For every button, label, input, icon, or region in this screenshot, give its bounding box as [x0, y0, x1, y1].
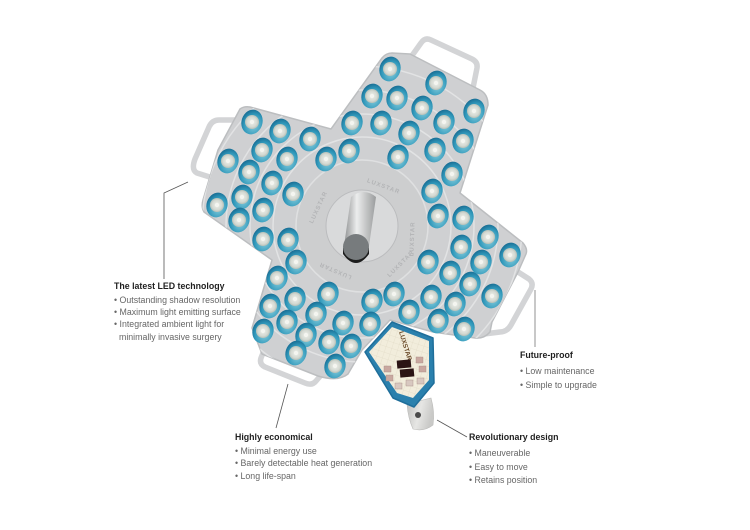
hub brand lettering: LUXSTAR — [387, 250, 416, 279]
callout: revolutionary design: • Retains position — [469, 475, 537, 485]
callout: future-proof: Future-proof — [520, 350, 573, 360]
handle: right — [484, 272, 532, 334]
callout: LED technology: • Outstanding shadow resolution — [114, 295, 240, 305]
panel housing — [365, 322, 434, 407]
handle: bottom — [260, 348, 322, 384]
panel knob — [407, 398, 434, 430]
callout: future-proof — [520, 290, 597, 390]
LED modules — [203, 54, 524, 381]
support pole — [344, 192, 376, 246]
hub brand lettering — [309, 178, 417, 279]
leader line — [276, 384, 288, 428]
buttons — [384, 357, 426, 389]
leader line — [534, 290, 536, 347]
callout: LED technology: minimally invasive surgery — [119, 332, 222, 342]
callout: economical — [235, 384, 372, 481]
callout: economical: • Long life-span — [235, 471, 296, 481]
callout: future-proof: • Simple to upgrade — [520, 380, 597, 390]
displays — [397, 359, 411, 369]
callout: LED technology: • Integrated ambient light for — [114, 319, 224, 329]
callout: future-proof: • Low maintenance — [520, 366, 595, 376]
handle: top right — [411, 39, 477, 88]
hub brand lettering: LUXSTAR — [309, 190, 329, 225]
callout: revolutionary design: • Easy to move — [469, 462, 528, 472]
hub brand lettering: LUXSTAR — [318, 260, 353, 279]
hub brand lettering: LUXSTAR — [366, 178, 401, 196]
callout: economical: • Minimal energy use — [235, 446, 317, 456]
callout: economical: • Barely detectable heat generation — [235, 458, 372, 468]
lamp body — [202, 53, 527, 379]
handle: left — [193, 120, 236, 179]
central hub — [296, 160, 428, 292]
callout: LED technology: The latest LED technology — [114, 281, 225, 291]
control panel — [365, 322, 434, 430]
callout: LED technology — [114, 182, 241, 342]
callout: LED technology: • Maximum light emitting surface — [114, 307, 241, 317]
hub brand lettering: LUXSTAR — [409, 221, 417, 257]
brand: LUXSTAR — [397, 331, 413, 362]
callout: economical: Highly economical — [235, 432, 313, 442]
panel face — [369, 327, 429, 398]
surgical lamp head — [193, 39, 532, 386]
callout: revolutionary design: Revolutionary design — [469, 432, 558, 442]
pole lens — [343, 234, 369, 263]
callout: revolutionary design — [437, 420, 558, 485]
concentric rings — [202, 66, 522, 386]
callout: revolutionary design: • Maneuverable — [469, 448, 530, 458]
leader line — [164, 182, 188, 279]
leader line — [437, 420, 467, 437]
